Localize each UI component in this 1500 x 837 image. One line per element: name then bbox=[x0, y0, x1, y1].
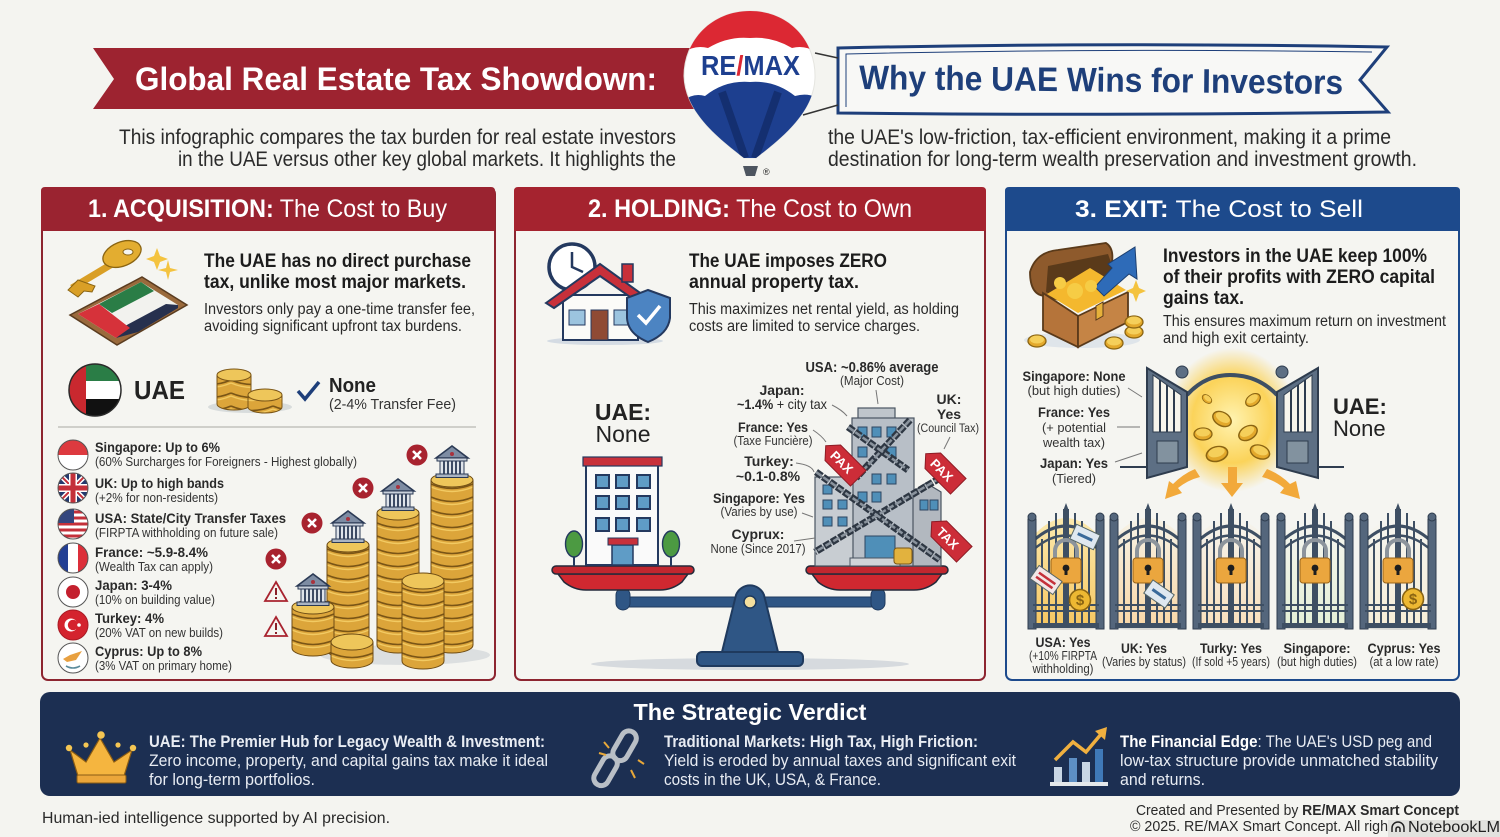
panel: strategic verdict bbox=[40, 692, 1460, 796]
tag: PAX right bbox=[918, 446, 966, 494]
holding labels by country: (Council Tax) bbox=[917, 423, 979, 435]
verdict heading: The Strategic Verdict bbox=[634, 699, 867, 725]
row: Singapore: (60% Surcharges for Foreigners - Highest globally) bbox=[95, 455, 357, 469]
holding labels by country: Yes bbox=[937, 406, 961, 422]
tag: TAX bbox=[924, 514, 972, 562]
arrows: flow out of the gate bbox=[1165, 467, 1300, 499]
panel: exit bbox=[1005, 187, 1460, 680]
right pan bbox=[806, 566, 948, 590]
row: Turkey: (20% VAT on new builds) bbox=[95, 626, 223, 640]
holding labels by country: Singapore: Yes bbox=[713, 490, 805, 506]
exit labels by country: Japan: Yes bbox=[1040, 455, 1108, 471]
holding labels by country: None (Since 2017) bbox=[710, 542, 806, 556]
label: UAE none: None bbox=[1333, 416, 1386, 441]
text: exit key message: gains tax. bbox=[1163, 287, 1244, 309]
gate: Singapore bbox=[1276, 503, 1354, 630]
chart: balance scale bbox=[552, 566, 948, 670]
watermark: NotebookLM: NotebookLM bbox=[1408, 819, 1500, 836]
panel: holding bbox=[514, 187, 986, 680]
row: USA: USA: State/City Transfer Taxes bbox=[95, 510, 286, 526]
stack 1 bbox=[292, 574, 334, 656]
gate captions: (+10% FIRPTA bbox=[1029, 649, 1098, 663]
label: UAE none: None bbox=[596, 421, 650, 447]
UAE row: UAE bbox=[134, 375, 185, 405]
holding labels by country: Japan: bbox=[759, 382, 805, 398]
holding labels by country: (Taxe Funcière) bbox=[734, 434, 812, 448]
intro text: right column: the UAE's low-friction, tax-efficient environment, making it a prime bbox=[828, 126, 1391, 149]
left door bbox=[1147, 366, 1188, 478]
stack 3 bbox=[377, 479, 419, 653]
label: UAE none bbox=[595, 399, 651, 447]
text: UAE hub bbox=[149, 733, 548, 789]
icon: gold key on UAE flag plate bbox=[68, 235, 187, 345]
title banner: red bbox=[93, 48, 700, 109]
gate captions: Cyprus: Yes bbox=[1368, 640, 1441, 656]
text: acquisition key message: tax, unlike most major markets. bbox=[204, 271, 466, 293]
footer: credits: Created and Presented by RE/MAX Smart Concept bbox=[1136, 803, 1459, 819]
stack front small bbox=[331, 634, 373, 668]
text: UAE hub: UAE: The Premier Hub for Legacy Wealth & Investment: bbox=[149, 733, 545, 751]
label: UAE none: UAE: bbox=[595, 399, 651, 425]
icon: check mark bbox=[298, 382, 319, 399]
text: acquisition key message: avoiding significant upfront tax burdens. bbox=[204, 318, 462, 335]
heading: exit: 3. EXIT: The Cost to Sell bbox=[1075, 196, 1363, 223]
row: Japan: (10% on building value) bbox=[95, 593, 215, 607]
row: Cyprus bbox=[58, 643, 232, 673]
title banner: white with blue outline: Why the UAE Wins for Investors bbox=[859, 59, 1343, 102]
heading: holding: 2. HOLDING: The Cost to Own bbox=[588, 195, 912, 223]
UAE row bbox=[69, 364, 456, 416]
heading: acquisition bbox=[41, 187, 495, 231]
icon: rising bar chart bbox=[1050, 727, 1108, 786]
label: UAE none: UAE: bbox=[1333, 394, 1387, 419]
tag: PAX right: PAX bbox=[927, 456, 956, 485]
text: exit key message bbox=[1163, 245, 1447, 347]
text: exit key message: This ensures maximum return on investment bbox=[1163, 313, 1447, 330]
text: exit key message: and high exit certainty. bbox=[1163, 330, 1309, 347]
panel: acquisition bbox=[41, 187, 495, 680]
text: holding key message: The UAE imposes ZERO bbox=[689, 250, 887, 272]
exit labels by country: wealth tax) bbox=[1042, 435, 1105, 450]
RE/MAX balloon logo: ® bbox=[763, 167, 770, 177]
intro text: left column: in the UAE versus other key global markets. It highlights the bbox=[178, 148, 676, 171]
exit labels by country: (Tiered) bbox=[1052, 471, 1096, 486]
holding labels by country: ~0.1-0.8% bbox=[736, 468, 801, 484]
text: holding key message: costs are limited to service charges. bbox=[689, 318, 920, 335]
stack 2 bbox=[327, 511, 369, 658]
gate captions: USA: Yes bbox=[1036, 634, 1091, 650]
text: traditional markets: Traditional Markets: High Tax, High Friction: bbox=[664, 733, 978, 751]
intro text: left column bbox=[119, 126, 676, 171]
holding labels by country: Turkey: bbox=[744, 453, 794, 469]
stack 4 bbox=[431, 446, 473, 653]
holding labels by country: (Major Cost) bbox=[840, 374, 904, 388]
text: acquisition key message: Investors only pay a one-time transfer fee, bbox=[204, 301, 475, 318]
exit labels by country: (+ potential bbox=[1042, 420, 1106, 435]
text: holding key message: annual property tax. bbox=[689, 271, 859, 293]
gate: Cyprus bbox=[1359, 503, 1437, 630]
text: acquisition key message: The UAE has no direct purchase bbox=[204, 250, 471, 272]
tag: PAX left bbox=[818, 438, 866, 486]
row: France: (Wealth Tax can apply) bbox=[95, 560, 213, 574]
icon: small coin stacks bbox=[208, 369, 292, 413]
footer: credits: © 2025. RE/MAX Smart Concept. All righ bbox=[1130, 819, 1388, 835]
text: holding key message: This maximizes net rental yield, as holding bbox=[689, 301, 959, 318]
country list: purchase taxes bbox=[58, 439, 357, 673]
intro text: right column: destination for long-term wealth preservation and investment growth. bbox=[828, 148, 1417, 171]
exit labels by country bbox=[1022, 368, 1126, 486]
tag: PAX left: PAX bbox=[827, 448, 856, 477]
icon: treasure chest with rising arrow bbox=[1024, 243, 1146, 349]
stack front tall bbox=[402, 573, 444, 669]
UAE row: None bbox=[329, 375, 376, 397]
row: Turkey bbox=[58, 610, 223, 640]
text: financial edge: The Financial Edge: The UAE's USD peg and bbox=[1120, 733, 1432, 751]
row: France bbox=[58, 543, 213, 574]
RE/MAX balloon logo: RE/MAX bbox=[701, 50, 800, 81]
leader lines: holding labels bbox=[794, 390, 950, 541]
text: acquisition key message bbox=[204, 250, 475, 335]
row: UK bbox=[58, 473, 224, 505]
intro text: right column bbox=[828, 126, 1417, 171]
text: UAE hub: for long-term portfolios. bbox=[149, 771, 315, 789]
gate captions: (but high duties) bbox=[1277, 655, 1357, 669]
text: exit key message: of their profits with ZERO capital bbox=[1163, 266, 1435, 288]
row: Cyprus: Cyprus: Up to 8% bbox=[95, 643, 202, 659]
row: Singapore bbox=[58, 439, 357, 470]
text: holding key message bbox=[689, 250, 959, 335]
text: traditional markets bbox=[664, 733, 1016, 789]
text: UAE hub: Zero income, property, and capital gains tax make it ideal bbox=[149, 752, 548, 770]
holding labels by country: USA: ~0.86% average bbox=[806, 360, 938, 376]
icon: crown bbox=[66, 731, 136, 783]
exit labels by country: (but high duties) bbox=[1028, 383, 1120, 398]
holding labels by country: UK: bbox=[937, 391, 961, 407]
gate captions: (at a low rate) bbox=[1370, 655, 1438, 669]
holding labels by country bbox=[710, 360, 979, 556]
heading: holding bbox=[514, 187, 986, 231]
intro text: left column: This infographic compares the tax burden for real estate investors bbox=[119, 126, 676, 149]
icon: UAE building, unburdened bbox=[566, 457, 680, 566]
status icons: cross and warning markers bbox=[265, 444, 428, 636]
icon: broken chain bbox=[591, 728, 644, 788]
text: financial edge bbox=[1120, 733, 1439, 789]
gate captions: withholding) bbox=[1032, 662, 1094, 676]
text: traditional markets: Yield is eroded by annual taxes and significant exit bbox=[664, 752, 1016, 770]
tag: TAX: TAX bbox=[933, 524, 962, 553]
chart: coin stacks with bank icons bbox=[292, 446, 490, 669]
gate: USA bbox=[1027, 503, 1105, 630]
gate captions: UK: Yes bbox=[1121, 640, 1167, 656]
closed gates row bbox=[1027, 503, 1437, 630]
gate captions: Turky: Yes bbox=[1200, 640, 1262, 656]
UAE row: (2-4% Transfer Fee) bbox=[329, 397, 456, 413]
leader lines: exit labels bbox=[1115, 388, 1142, 462]
icon: house with clock and shield bbox=[546, 244, 670, 345]
gate captions: (Varies by status) bbox=[1102, 655, 1186, 669]
holding labels by country: Cyprux: bbox=[732, 526, 784, 542]
text: financial edge: and returns. bbox=[1120, 771, 1205, 789]
right door bbox=[1276, 366, 1318, 478]
footer: tagline: Human-ied intelligence supported by AI precision. bbox=[42, 810, 390, 827]
row: Singapore: Singapore: Up to 6% bbox=[95, 439, 220, 455]
RE/MAX balloon logo bbox=[680, 5, 820, 177]
row: Cyprus: (3% VAT on primary home) bbox=[95, 659, 232, 673]
title banner: red: Global Real Estate Tax Showdown: bbox=[135, 61, 657, 97]
footer: credits bbox=[1130, 803, 1459, 835]
row: UK: UK: Up to high bands bbox=[95, 475, 224, 491]
row: Japan: Japan: 3-4% bbox=[95, 577, 173, 593]
text: financial edge: low-tax structure provide unmatched stability bbox=[1120, 752, 1439, 770]
holding labels by country: ~1.4% + city tax bbox=[737, 396, 827, 412]
gate captions: Singapore: bbox=[1284, 640, 1350, 656]
row: USA bbox=[58, 509, 286, 540]
heading: exit bbox=[1005, 187, 1460, 231]
holding labels by country: (Varies by use) bbox=[720, 505, 798, 519]
heading: acquisition: 1. ACQUISITION: The Cost to Buy bbox=[88, 195, 447, 223]
row: France: France: ~5.9-8.4% bbox=[95, 544, 209, 560]
icon: open UAE gate with coins bbox=[1120, 348, 1344, 492]
gate captions: (If sold +5 years) bbox=[1192, 655, 1270, 669]
row: Japan bbox=[58, 577, 215, 607]
label: UAE none bbox=[1333, 394, 1387, 441]
left pan bbox=[552, 566, 694, 590]
row: Turkey: Turkey: 4% bbox=[95, 610, 165, 626]
exit labels by country: France: Yes bbox=[1038, 404, 1110, 420]
text: exit key message: Investors in the UAE keep 100% bbox=[1163, 245, 1427, 267]
text: traditional markets: costs in the UK, USA, & France. bbox=[664, 771, 881, 789]
gate: UK bbox=[1109, 503, 1187, 630]
icon: UAE flag bbox=[69, 364, 121, 416]
row: USA: (FIRPTA withholding on future sale) bbox=[95, 526, 278, 540]
gate: Turkey bbox=[1192, 503, 1270, 630]
gate captions bbox=[1029, 634, 1441, 676]
holding labels by country: France: Yes bbox=[738, 419, 808, 435]
icon: chained taxed buildings bbox=[815, 408, 972, 566]
exit labels by country: Singapore: None bbox=[1022, 368, 1126, 384]
title banner: white with blue outline bbox=[803, 45, 1388, 115]
row: UK: (+2% for non-residents) bbox=[95, 491, 218, 505]
